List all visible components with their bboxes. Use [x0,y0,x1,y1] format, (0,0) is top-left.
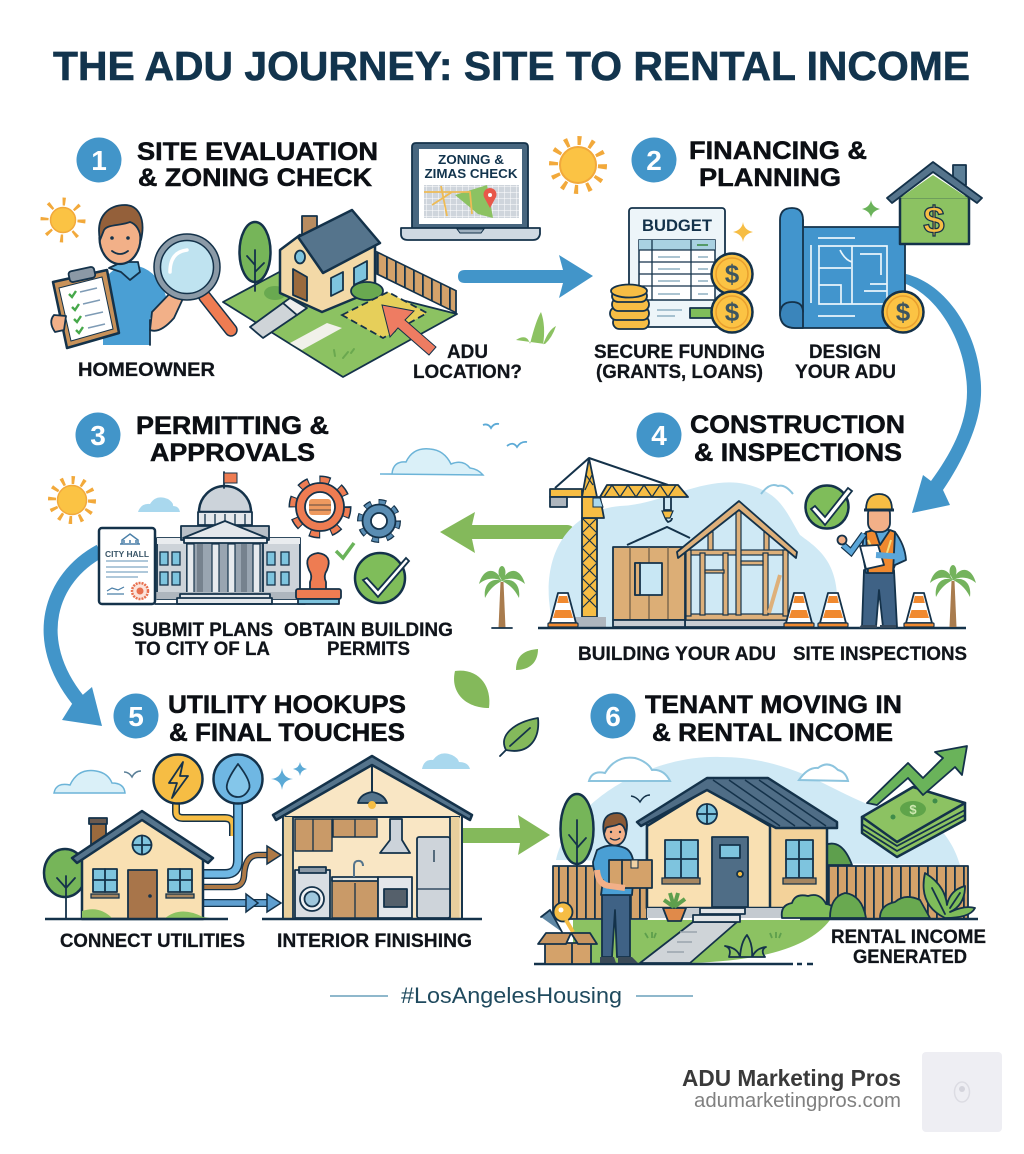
interior cutaway house [262,756,482,919]
icon: water [214,754,262,804]
label: design your ADU [795,342,896,383]
step 3 heading: PERMITTING & [136,412,329,440]
bushes [782,873,975,918]
icon: small leaf [516,649,538,670]
label: rental income generated [831,927,986,968]
icon: house with dollar: $ [923,200,945,242]
sky blob [556,757,960,865]
step 6 heading: TENANT MOVING IN [645,691,902,719]
icon: money stack [862,787,965,857]
step 3 number badge: 3 [90,420,106,451]
step 4 panel: construction [538,411,976,665]
step 6 heading [645,691,902,747]
icon: palm tree [479,566,525,628]
icon: outlined leaf [500,718,538,756]
step 5 heading: & FINAL TOUCHES [169,719,405,747]
label: ADU location: LOCATION? [413,362,522,383]
step 1 heading [137,138,378,192]
step 2 heading [689,137,867,192]
moving box with key [538,902,597,964]
step 6 panel: tenant [534,691,986,968]
step 6 heading: & RENTAL INCOME [652,719,893,747]
label: design your ADU: DESIGN [809,342,881,363]
arrow: step 2 to 4 [906,274,981,513]
utility pipes [176,803,272,903]
inspector worker [838,494,906,628]
icon: utility arrowheads [246,846,281,912]
brand logo tile [922,1052,1002,1132]
step 2 number badge [632,138,676,182]
icon: money stack: $ [909,802,917,817]
icon: house with dollar [887,162,982,244]
step 4 number badge: 4 [651,420,667,451]
icon: small blue gear [361,503,397,539]
label: site inspections: SITE INSPECTIONS [793,644,967,665]
wall panel [613,547,685,620]
icon: rubber stamp [296,553,341,604]
step 3 number badge [76,412,120,458]
hashtag footer: #LosAngelesHousing [401,983,622,1008]
icon: palm tree [930,565,976,627]
icon: laptop zoning check: ZONING & [438,153,504,167]
isometric lot with house [223,210,457,377]
arrow: step 3 to 5 [51,551,102,726]
budget sheet with coins: BUDGET [642,216,713,235]
tree [560,794,594,866]
step 5 heading: UTILITY HOOKUPS [168,691,406,719]
timber house frame [613,501,797,627]
icon: sun [44,202,82,238]
step 3 heading: APPROVALS [150,439,315,467]
step 5 heading [168,691,406,747]
icon: small green check [336,543,354,558]
label: obtain permits [284,620,453,660]
city hall building [155,472,305,604]
icon: sparkles [271,762,307,790]
label: secure funding: SECURE FUNDING [594,342,765,363]
label: ADU location [413,342,522,383]
label: interior finishing: INTERIOR FINISHING [277,931,472,952]
step 2 heading: FINANCING & [689,137,867,165]
label: rental income generated: GENERATED [853,947,967,968]
label: submit plans [132,620,273,660]
arrow: step 5 to 6 [463,815,550,855]
icon: cloud [54,771,125,793]
label: ADU location: ADU [447,342,488,363]
homeowner figure [99,205,186,345]
label: connect utilities: CONNECT UTILITIES [60,931,245,952]
icon: traffic cones [548,593,934,627]
step 2 number badge: 2 [646,145,662,176]
step 3 heading [136,412,329,467]
fences [553,844,968,919]
ground line [538,627,966,629]
step 2 panel: financing and planning [554,137,982,513]
step 6 number badge: 6 [605,701,621,732]
label: design your ADU: YOUR ADU [795,362,896,383]
step 5 number badge: 5 [128,701,144,732]
arrow: income growth [867,746,967,805]
icon: bird [124,771,141,777]
icon: small cloud [138,497,180,512]
decorative leaves [454,649,538,756]
arrow: step 1 to 2 [458,255,593,298]
icon: coin on blueprint [882,292,924,332]
blueprint [780,208,905,328]
step 3 panel: permitting [51,412,574,726]
brand name: ADU Marketing Pros [682,1065,901,1091]
brand URL: adumarketingpros.com [694,1089,901,1112]
sky blob background [549,482,837,628]
ground line right [800,918,978,920]
step 5 number badge [114,694,158,738]
label: obtain permits: PERMITS [327,639,410,660]
icon: sun [52,480,92,520]
budget sheet with coins [610,208,753,332]
label: building your ADU: BUILDING YOUR ADU [578,644,776,665]
step 4 heading [690,411,905,467]
step 1 number badge [76,138,122,182]
city hall document [99,528,155,604]
city hall document: CITY HALL [105,549,149,559]
step 4 heading: CONSTRUCTION [690,411,905,439]
step 6 number badge [590,694,636,738]
icon: cloud [761,485,793,494]
icon: large leaf [454,671,489,708]
step 2 heading: PLANNING [699,164,841,192]
step 1 number badge: 1 [91,145,107,176]
small house [44,811,228,919]
step 1 heading: SITE EVALUATION [137,138,378,166]
arrow: step 4 to 3 [440,512,574,553]
step 4 heading: & INSPECTIONS [694,439,902,467]
step 4 number badge [636,412,682,458]
tower crane [550,458,690,628]
lawn and path [534,920,830,964]
icon: magnifying glass [154,234,231,330]
icon: large orange gear [294,481,346,533]
arrow: ADU location pointer [382,305,436,355]
icon: bird [631,795,650,802]
label: rental income generated: RENTAL INCOME [831,927,986,948]
icon: clouds [589,758,848,781]
icon: clipboard checklist [51,266,119,348]
label: obtain permits: OBTAIN BUILDING [284,620,453,641]
tenant carrying box [593,813,652,963]
title: THE ADU JOURNEY: SITE TO RENTAL INCOME [53,43,970,89]
icon: sparkle [862,200,880,218]
icon: birds [483,424,527,447]
step 1 heading: & ZONING CHECK [138,164,372,192]
icon: sun [554,140,602,190]
icon: laptop zoning check: ZIMAS CHECK [424,167,518,181]
icon: electricity [154,754,202,804]
step 1 panel: site evaluation [44,138,593,383]
icon: cloud [422,753,470,769]
icon: check circle [806,486,852,528]
label: secure funding [594,342,765,383]
icon: green check circle [355,553,409,603]
label: submit plans: SUBMIT PLANS [132,620,273,641]
icon: laptop zoning check [401,143,540,240]
label: homeowner: HOMEOWNER [78,360,215,381]
icon: cloud [380,449,483,475]
label: submit plans: TO CITY OF LA [135,639,270,660]
step 5 panel: utility hookups [44,691,550,952]
ranch house [637,778,837,922]
label: secure funding: (GRANTS, LOANS) [596,362,763,383]
icon: grass [516,312,556,345]
